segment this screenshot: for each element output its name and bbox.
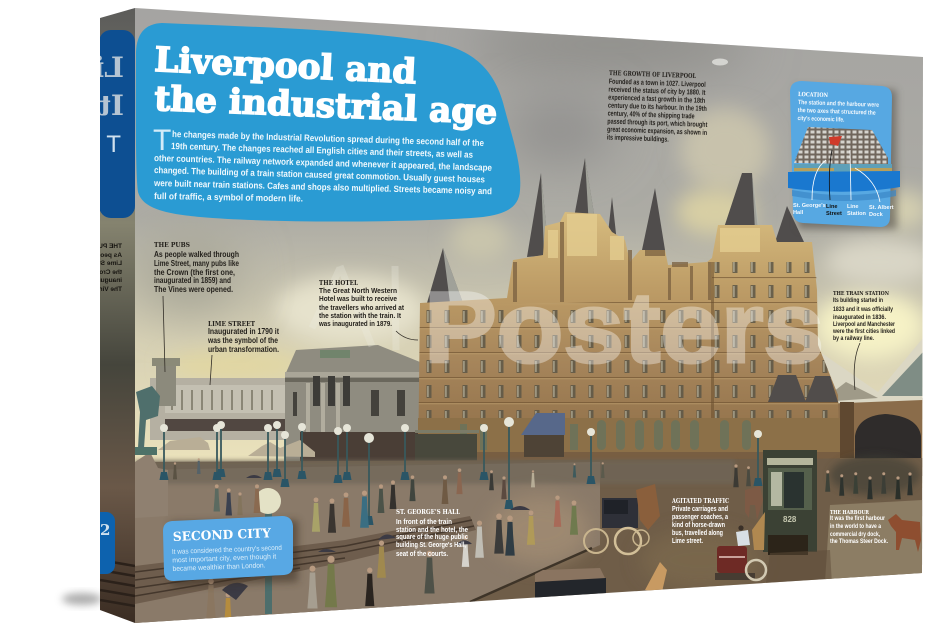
clouds — [140, 15, 935, 379]
panel: second city — [163, 516, 298, 586]
text: the train station: Liverpool and Manchester — [833, 321, 895, 328]
intro text: changed. The building of a train station caused great commotion. Usually guest houses — [154, 165, 485, 185]
card — [163, 516, 293, 581]
text: the train station: 1833 and it was officially — [833, 306, 893, 313]
text: the train station: THE TRAIN STATION — [833, 291, 889, 297]
text: the hotel — [318, 279, 404, 328]
text: Lime Street: was the symbol of the — [207, 336, 278, 345]
intro text: other countries. The railway network expanded and whenever it appeared, the landscape — [154, 153, 492, 173]
building: North Western Hotel — [415, 158, 840, 468]
corner shading — [711, 262, 714, 418]
card shadow — [796, 86, 897, 229]
text: the harbour — [830, 510, 888, 545]
hotel masonry — [418, 212, 838, 418]
text: the train station: inaugurated in 1836. — [833, 314, 886, 321]
text: the growth of Liverpool: experienced a fast growth in the 18th — [608, 92, 705, 105]
text: the train station: by a railway line. — [833, 335, 874, 342]
spine mirrored caption — [100, 244, 122, 291]
text: the hotel: Hotel was built to receive — [319, 294, 398, 303]
spine blue tab — [100, 512, 115, 574]
map leader lines — [812, 150, 880, 202]
ground floor arches — [460, 420, 751, 450]
location text: city's economic life. — [797, 115, 845, 124]
building: white terrace behind — [150, 358, 285, 440]
text: St. George's Hall: In front of the train — [396, 517, 452, 526]
horse, harbour — [888, 514, 921, 552]
panel: canvas spine — [100, 8, 135, 623]
title: Liverpool and — [154, 40, 417, 92]
map labels: Hall — [793, 210, 804, 216]
hotel spires — [427, 158, 804, 303]
intro text: 19th century. The changes reached all English cities and their streets, as well as — [171, 141, 473, 160]
cart and driver — [715, 512, 766, 580]
text: agitated traffic: Lime street. — [672, 536, 703, 545]
spine mirrored caption: As people — [91, 252, 122, 259]
3D city map — [788, 127, 900, 201]
canvas shadow — [62, 593, 102, 605]
intro text: were built near train stations. Cafes and shops also multiplied. Streets became noisy and — [153, 178, 492, 196]
text: agitated traffic: Private carriages and — [672, 504, 728, 513]
text: Lime Street: Inaugurated in 1790 it — [208, 327, 279, 336]
text: agitated traffic: passenger coaches, a — [672, 512, 729, 521]
text: the pubs: THE PUBS — [154, 241, 190, 249]
tram — [763, 450, 817, 555]
text: agitated traffic: bus, travelled along — [672, 528, 723, 537]
card text: became wealthier than London. — [172, 562, 266, 573]
card heading: SECOND CITY — [173, 525, 272, 544]
text: the hotel: THE HOTEL — [319, 279, 358, 287]
tiled cobbles — [654, 540, 747, 590]
panel: title and intro — [136, 23, 520, 222]
panel: location map — [788, 81, 900, 229]
title — [154, 40, 498, 133]
spine mirrored drop cap: T — [106, 131, 121, 158]
text: the harbour: It was the first harbour — [830, 515, 885, 522]
text: agitated traffic: AGITATED TRAFFIC — [671, 497, 729, 505]
intro text: he changes made by the Industrial Revolution spread during the second half of the — [172, 129, 484, 148]
location text: The station and the harbour were — [798, 99, 880, 109]
text: the harbour: commercial dry dock, — [830, 531, 880, 538]
text: the harbour: the Thomas Steer Dock. — [830, 538, 888, 545]
text: the growth of Liverpool: its impressive buildings. — [607, 132, 669, 144]
text: St. George's Hall: square of the huge public — [396, 532, 468, 541]
text: the growth of Liverpool: THE GROWTH OF LIVERPOOL — [609, 69, 696, 80]
map labels: Dock — [869, 212, 884, 218]
intro text — [153, 129, 492, 204]
building: station shed — [820, 338, 923, 476]
building: grey classical block — [285, 345, 420, 462]
text: St. George's Hall: ST. GEORGE'S HALL — [396, 508, 460, 516]
street lamps — [160, 417, 762, 614]
crowd, station side — [825, 455, 920, 499]
dormer roofs — [768, 375, 806, 402]
map labels: St. George's — [793, 203, 826, 209]
text: Lime Street: urban transformation. — [208, 345, 279, 354]
map labels: St. Albert — [869, 205, 894, 211]
text: the train station: were the first cities linked — [832, 328, 895, 335]
text: the pubs — [154, 241, 239, 294]
map labels: Street — [826, 211, 842, 217]
card text: It was considered the country's second — [172, 545, 282, 556]
map labels — [793, 203, 894, 218]
spine mirrored title: Li — [94, 51, 124, 84]
upper gold highlights — [548, 214, 760, 260]
text: the pubs: Lime Street, many pubs like — [154, 259, 239, 268]
location heading: LOCATION — [798, 92, 829, 99]
text: the hotel: the travellers who arrived at — [319, 303, 404, 312]
card — [790, 81, 892, 227]
panel: canvas spine: It — [98, 89, 124, 122]
horse-drawn carriage — [584, 484, 660, 554]
spine steps — [100, 560, 135, 606]
leader lines — [163, 296, 860, 390]
text: the hotel: The Great North Western — [319, 286, 397, 295]
location text — [797, 99, 880, 125]
upper shaded bays and chimneys — [513, 222, 711, 302]
text: the pubs: The Vines were opened. — [154, 285, 233, 294]
text: agitated traffic: kind of horse-drawn — [672, 520, 725, 529]
ground shadow — [765, 550, 832, 590]
drop cap: T — [153, 124, 171, 157]
text: Lime Street — [207, 320, 279, 354]
text: St. George's Hall: seat of the courts. — [396, 549, 448, 558]
text: the hotel: the station with the train. It — [319, 311, 401, 320]
text: the growth of Liverpool: century, 40% of the shipping trade — [608, 108, 695, 121]
map labels: Station — [847, 211, 867, 217]
spire light sides — [443, 158, 762, 303]
horse, centre — [745, 486, 763, 520]
spine mirrored caption: The Vines — [91, 286, 122, 293]
watermark: logo strokes — [312, 266, 396, 350]
text: the pubs: the Crown (the first one, — [154, 268, 235, 277]
spine blue band — [99, 30, 135, 218]
ground — [135, 458, 923, 625]
tram shelter — [415, 434, 477, 462]
card shadow — [170, 520, 298, 586]
text: St. George's Hall — [396, 508, 468, 558]
text: the train station — [832, 291, 895, 342]
text: the growth of Liverpool: received the status of city by 1880. It — [608, 84, 706, 97]
spine mirrored caption: THE PUBS — [88, 243, 122, 250]
text: the growth of Liverpool: great economic expansion, as shown in — [607, 124, 707, 137]
text: St. George's Hall: station and the hotel, the — [396, 525, 468, 534]
text: Lime Street: LIME STREET — [208, 320, 255, 328]
text: the growth of Liverpool: passed through its port, which brought — [607, 116, 708, 129]
panel: canvas spine: 2 — [100, 521, 110, 539]
steps — [135, 516, 476, 604]
ground sandy right — [825, 500, 923, 582]
card text — [172, 545, 283, 573]
map labels: Line — [847, 204, 858, 210]
text: the harbour: in the world to have a — [830, 523, 881, 530]
watermark: Posters: Posters — [424, 272, 824, 384]
location text: the two axes that structured the — [798, 107, 876, 117]
spine mirrored caption: the Crown — [90, 269, 122, 276]
stone lions — [158, 437, 315, 457]
sky — [135, 8, 925, 488]
plaza — [135, 462, 600, 625]
card text: most important city, even though it — [172, 554, 276, 564]
umbrellas — [222, 475, 530, 600]
statue pedestal — [135, 386, 168, 488]
horse, foreground — [645, 562, 667, 592]
tram: 828 — [783, 515, 797, 524]
large foreground lamp — [265, 508, 272, 614]
text: the growth of Liverpool: Founded as a town in 1027. Liverpool — [609, 76, 706, 89]
text: St. George's Hall: building St. George's Hall, — [396, 540, 466, 549]
map labels: Line — [826, 204, 838, 210]
ground floor band — [418, 418, 839, 452]
text: agitated traffic — [671, 497, 729, 545]
spine mirrored caption: inaugurated — [85, 277, 122, 284]
text: the hotel: was inaugurated in 1879. — [318, 319, 392, 328]
windows grid — [418, 262, 838, 418]
text: the train station: Its building started in — [833, 297, 883, 304]
plaza upper band — [135, 460, 735, 484]
text: the pubs: inaugurated in 1859) and — [154, 276, 231, 285]
text: the growth of Liverpool: century due to its harbour. In the 19th — [608, 100, 707, 113]
hotel porch — [521, 413, 565, 435]
title: the industrial age — [154, 79, 498, 133]
text: the harbour: THE HARBOUR — [830, 510, 869, 516]
panel background — [136, 23, 520, 222]
carriage roof foreground — [535, 568, 606, 600]
text: the pubs: As people walked through — [154, 250, 239, 259]
plaza highlights — [490, 496, 590, 564]
text: the growth of Liverpool — [607, 69, 710, 145]
spine mirrored caption: Lime Street — [86, 260, 122, 267]
crowd — [173, 458, 751, 627]
intro text: full of traffic, a symbol of modern life. — [154, 191, 303, 204]
kerb — [470, 548, 592, 602]
